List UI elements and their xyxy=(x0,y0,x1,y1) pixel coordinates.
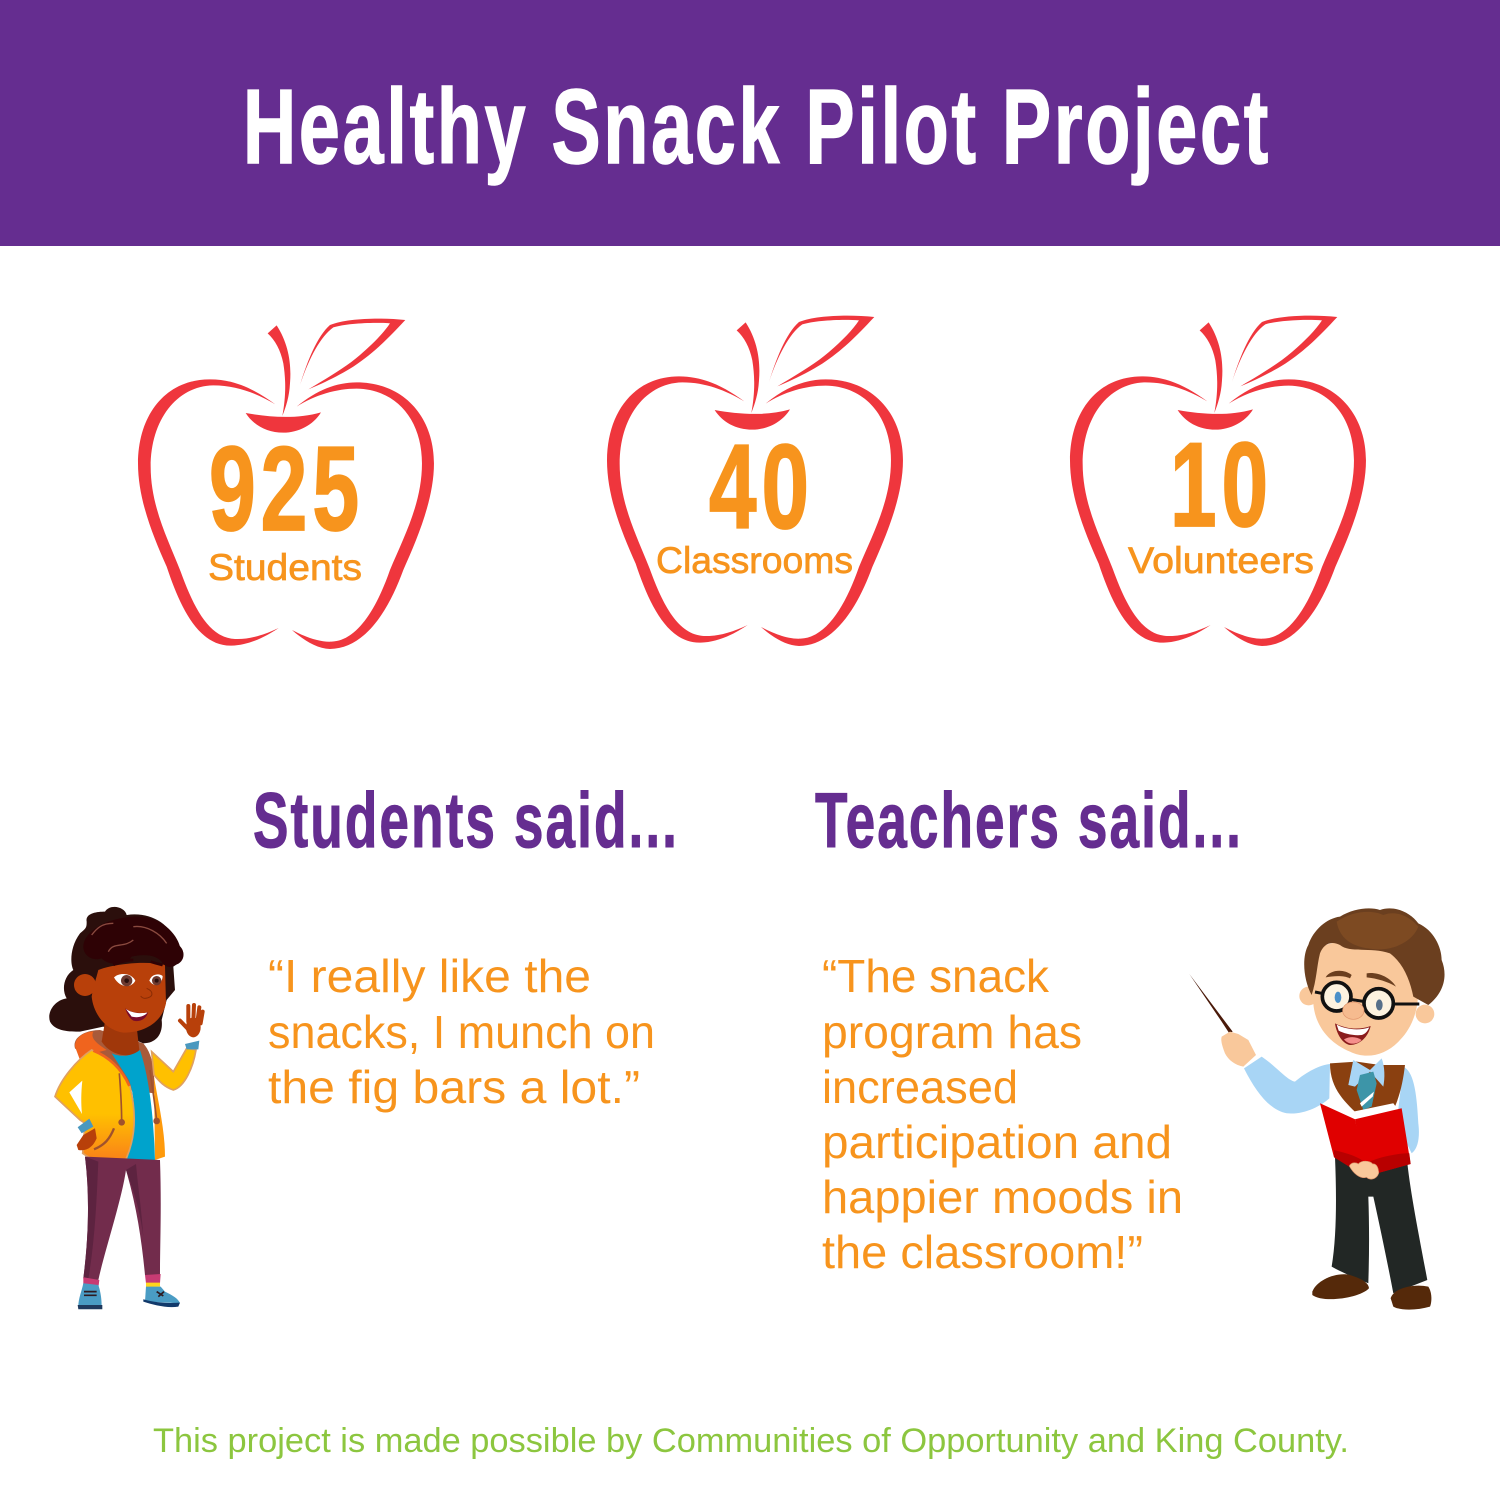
book xyxy=(1322,1103,1398,1120)
hands on book xyxy=(1349,1161,1379,1179)
student quote: “I really like the xyxy=(268,950,591,1002)
teacher quote: program has xyxy=(822,1006,1082,1058)
number: 925 xyxy=(209,422,364,556)
stat: 925 students xyxy=(138,319,434,649)
eyebrows xyxy=(113,960,163,965)
shoes xyxy=(1312,1274,1369,1299)
glasses xyxy=(1315,982,1419,1018)
hand xyxy=(1221,1032,1256,1067)
shirt xyxy=(112,1050,155,1164)
icon: apple outline xyxy=(1070,316,1366,646)
drawstrings xyxy=(119,1070,157,1122)
shirt far sleeve xyxy=(1397,1067,1419,1153)
neck xyxy=(102,1022,139,1055)
leggings xyxy=(83,1157,161,1280)
eyes xyxy=(114,974,135,986)
trousers xyxy=(1332,1157,1427,1293)
icon: apple outline xyxy=(607,316,903,646)
jacket xyxy=(55,1050,134,1166)
socks xyxy=(83,1274,161,1288)
student quote: snacks, I munch on xyxy=(268,1006,655,1058)
student quote xyxy=(268,950,655,1113)
hood xyxy=(75,1030,155,1093)
teacher quote: participation and xyxy=(822,1116,1172,1168)
cuffs xyxy=(78,1041,199,1133)
teacher quote: “The snack xyxy=(822,950,1050,1002)
nose xyxy=(141,988,152,998)
shoes xyxy=(78,1283,102,1307)
title banner xyxy=(0,0,1500,246)
label: Students xyxy=(208,547,362,588)
icon: apple outline xyxy=(138,319,434,649)
head xyxy=(1299,987,1318,1005)
ear xyxy=(74,974,96,996)
student quote: the fig bars a lot.” xyxy=(268,1061,640,1113)
illustration: teacher xyxy=(1189,908,1445,1310)
stat: 10 volunteers xyxy=(1070,316,1366,646)
face xyxy=(92,963,166,1033)
pointer xyxy=(1189,974,1233,1033)
mouth xyxy=(125,1008,148,1021)
tie xyxy=(1357,1072,1377,1110)
hands xyxy=(180,1005,203,1037)
illustration: student girl xyxy=(49,907,203,1309)
teacher quote: happier moods in xyxy=(822,1171,1183,1223)
mouth xyxy=(1335,1023,1371,1045)
teacher quote xyxy=(822,950,1183,1278)
back hair xyxy=(49,907,183,1043)
footer credit: This project is made possible by Communities of Opportunity and King County. xyxy=(153,1422,1349,1460)
vest xyxy=(1330,1062,1405,1117)
number: 10 xyxy=(1170,418,1273,552)
number: 40 xyxy=(709,420,814,554)
arm xyxy=(1244,1057,1330,1114)
shirt collar xyxy=(1348,1058,1384,1087)
hair xyxy=(1304,908,1445,1005)
teacher quote: the classroom!” xyxy=(822,1226,1143,1278)
stat: 40 classrooms xyxy=(607,316,903,646)
label: Volunteers xyxy=(1128,540,1314,581)
front hair xyxy=(83,917,184,967)
eyebrows xyxy=(1326,971,1396,987)
teacher quote: increased xyxy=(822,1061,1018,1113)
heading: students said: Students said... xyxy=(253,776,679,864)
nose xyxy=(1343,1002,1364,1019)
heading: teachers said: Teachers said... xyxy=(815,776,1243,864)
label: Classrooms xyxy=(656,540,853,581)
